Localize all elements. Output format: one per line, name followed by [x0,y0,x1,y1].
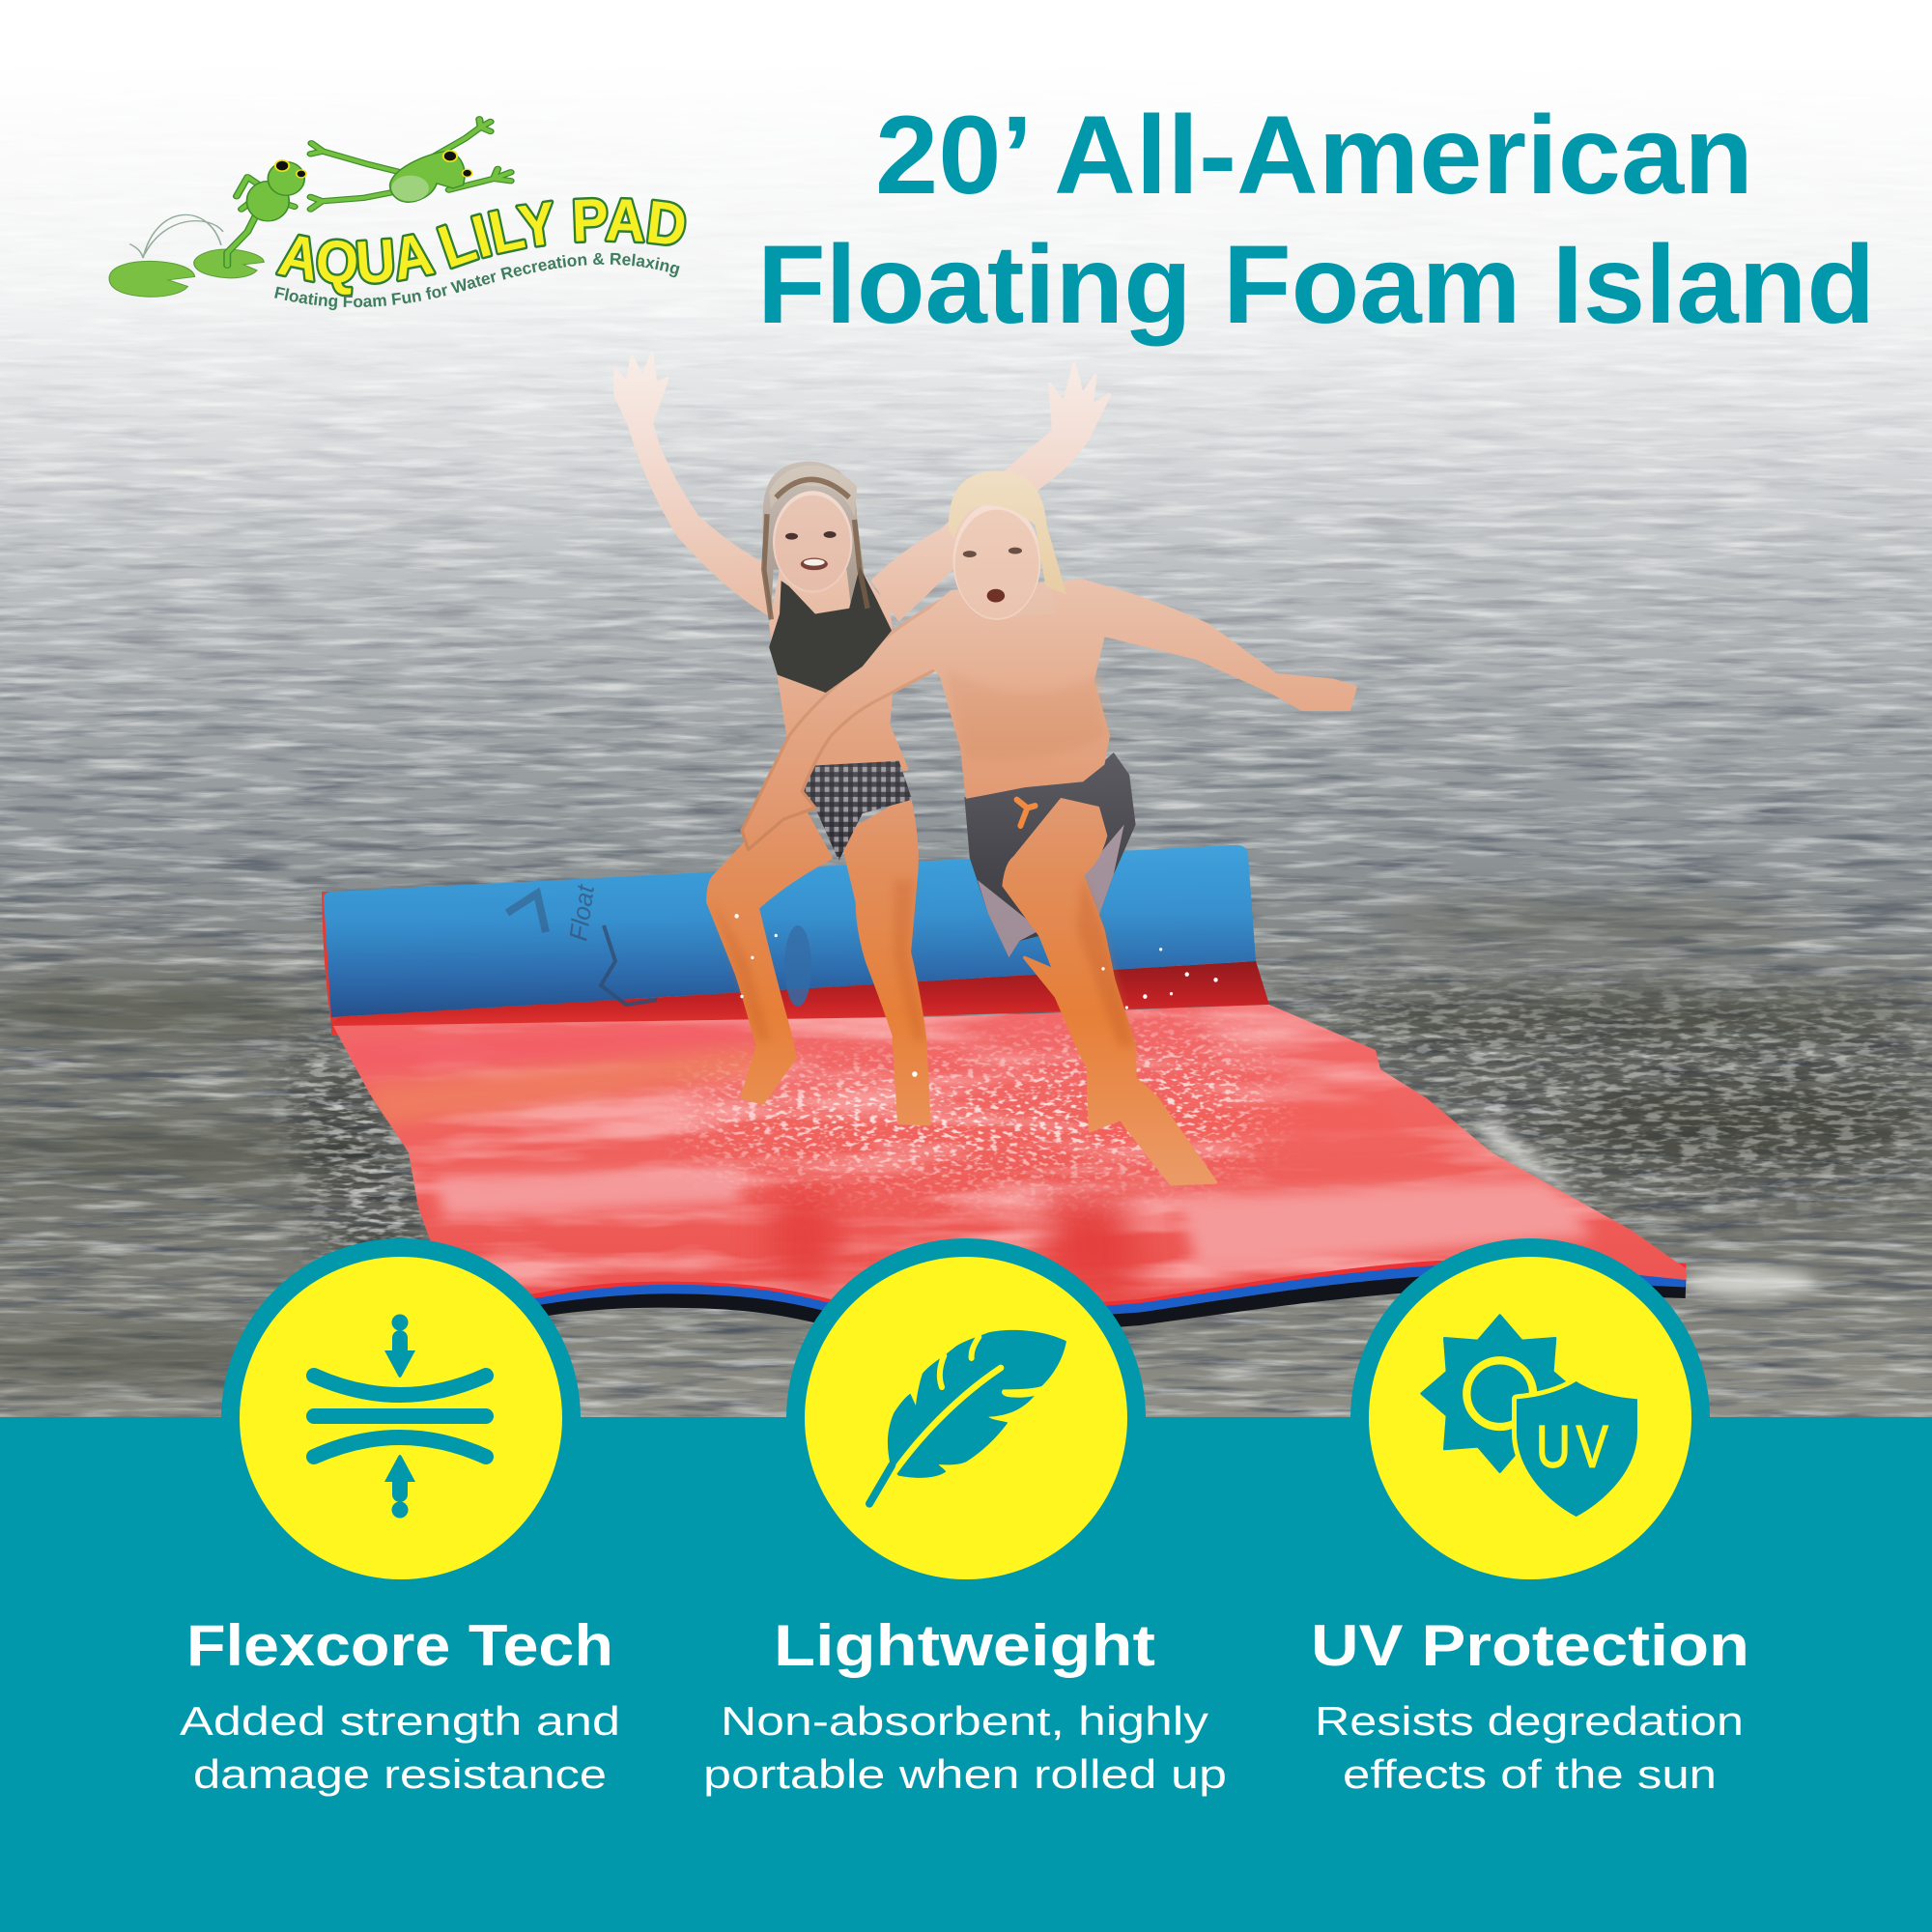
illustration: rolled foam mat [322,845,1269,1036]
description: Added strength and [180,1698,620,1744]
logo marks on the roll [507,894,811,1007]
icon: feather [869,1330,1066,1504]
panel: lake photo background [0,180,1932,1417]
heading: UV Protection [1311,1613,1749,1678]
leaping frog limbs [311,119,511,210]
heading: Lightweight [774,1613,1155,1678]
dark wave bands in the water [0,909,1932,1384]
girl [615,355,1110,1124]
badge circle [1350,1238,1710,1598]
badge circle [786,1238,1146,1598]
jumping frog body [246,182,289,221]
jump arcs [129,214,223,258]
lily pads [109,261,195,297]
logo: Aqua Lily Pad [108,116,687,311]
leaping frog body [390,152,465,202]
red edge of roll [322,892,340,1024]
description: portable when rolled up [703,1751,1227,1797]
jumping frog limbs [227,119,511,266]
foam at mat's right corner [1478,1111,1816,1296]
boy [742,470,1355,1184]
title [757,94,1875,347]
feature: Lightweight [703,1238,1227,1797]
description: effects of the sun [1343,1751,1717,1797]
boy torso [915,581,1108,797]
girl hair strands [764,479,867,619]
description: damage resistance [193,1751,607,1797]
boy face tint [955,510,1038,618]
logo: Aqua Lily Pad: Floating Foam Fun for Water Recreation & Relaxing [274,253,680,311]
girl eyes and mouth [785,531,837,570]
description: Non-absorbent, highly [721,1698,1208,1744]
feature: Flexcore Tech [180,1238,620,1797]
boy face [952,502,1041,620]
icon: sun and UV shield [1422,1316,1637,1517]
description [1315,1698,1744,1797]
boy hair [949,470,1066,594]
teal footer band [0,1417,1932,1932]
girl legs [708,791,831,1103]
heading: Flexcore Tech [186,1613,613,1678]
girl face [773,491,852,593]
boy shorts drawstring [1017,800,1036,826]
illustration: two kids jumping on the mat [615,355,1355,1184]
icon: compression arrows and flexing layers [314,1314,486,1519]
girl swim bottom [792,761,912,861]
description [703,1698,1227,1797]
title: Floating Foam Island [757,223,1875,347]
illustration: unrolled red foam mat [333,1005,1687,1327]
boy swim shorts [964,753,1136,957]
icon: sun and UV shield: UV [1536,1412,1608,1480]
reflections of the kids on the mat [773,1188,1140,1294]
girl swim top [769,567,892,693]
boy chest shading [946,669,1106,761]
mat shading and water sheen [342,1005,1613,1300]
girl torso [771,570,907,775]
printed text on roll: Float [563,882,600,943]
logo tagline [273,265,682,307]
logo frogs and lily pads [109,119,511,297]
girl hair back [763,462,868,619]
boy arms [742,592,956,849]
badge circle [221,1238,581,1598]
boy eyes and mouth [963,548,1022,602]
title: 20’ All-American [875,94,1753,217]
mat underside behind the roll [331,961,1269,1036]
fog overlay on the upper photo [0,0,1932,1014]
description: Resists degredation [1315,1698,1744,1744]
kids' details seen through the fog [764,479,1038,693]
shadow, blue and red layer edge [454,1259,1686,1329]
logo wordmark [276,241,688,283]
girl raised arms [615,355,768,614]
water droplets in the air [734,914,1218,1077]
boy back leg [1025,957,1216,1184]
boy front leg [1004,800,1136,1130]
girl hairline [769,466,857,517]
logo: Aqua Lily Pad: AQUA LILY PAD [274,197,687,298]
feature: UV Protection [1311,1238,1749,1797]
boy leg shading [1077,874,1135,1046]
description [180,1698,620,1797]
blue roll [324,845,1256,1017]
girl face tint [775,496,850,590]
girl leg shading [711,880,925,1041]
boy neck [978,581,1056,619]
